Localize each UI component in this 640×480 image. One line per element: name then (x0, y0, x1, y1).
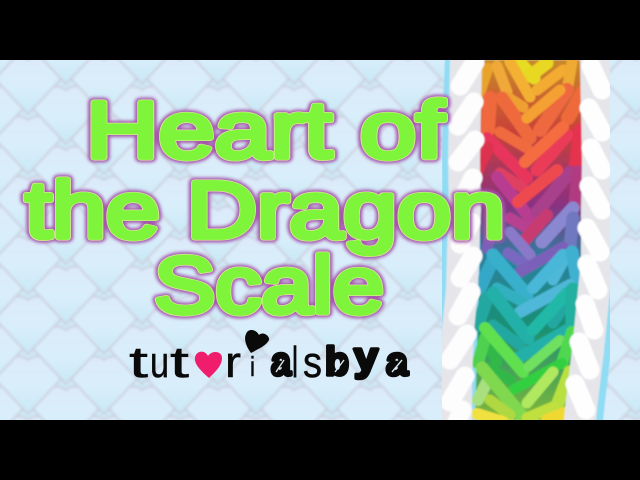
bracelet: rainbow dragon scale band (450, 60, 602, 424)
top black bar (0, 0, 640, 60)
bracelet dark core (475, 60, 585, 420)
amber and yellow row (480, 62, 572, 97)
logo thin letters (129, 338, 322, 387)
title cream edge: Scale (154, 240, 384, 330)
title cream edge: Heart of (86, 86, 445, 174)
logo bold letters (271, 335, 409, 384)
lime and yellow row (477, 368, 570, 422)
logo thin letters: t (170, 338, 189, 387)
title glow (25, 86, 505, 330)
title glow: the Dragon (25, 166, 505, 254)
green row (478, 328, 572, 390)
orange-red row (488, 90, 583, 138)
icon: black heart (245, 330, 269, 353)
logo thin letters: l (292, 338, 298, 387)
violet row (487, 208, 573, 272)
logo thin letters: i (250, 351, 255, 382)
logo: tutorialsbya (129, 330, 409, 387)
logo bold letters: a (271, 340, 292, 384)
bracelet light blue outline (458, 60, 598, 420)
coloured bands (477, 62, 583, 422)
logo bold letters: b (325, 340, 349, 384)
logo thin letters: u (150, 338, 169, 387)
white left strand (450, 60, 475, 424)
title cream edge: the Dragon (25, 166, 505, 254)
logo thin letters: r (225, 338, 241, 387)
title cream edge (25, 86, 505, 330)
blue row (480, 252, 578, 312)
title glow: Scale (154, 240, 384, 330)
magenta row (497, 170, 578, 240)
bottom black bar (0, 420, 640, 480)
icon: pink heart (195, 352, 222, 378)
logo letter highlights (276, 360, 402, 372)
title line 3: Scale (154, 240, 384, 330)
background: dragon scale pattern (0, 50, 640, 430)
title: Heart of the Dragon Scale (25, 86, 505, 330)
teal row (478, 290, 573, 358)
red-pink row (477, 127, 580, 178)
logo thin letters: t (129, 338, 148, 387)
title line 2: the Dragon (25, 166, 505, 254)
white right strand (575, 60, 602, 420)
logo thin letters: s (303, 338, 322, 387)
title glow: Heart of (86, 86, 445, 174)
logo bold letters: y (354, 335, 379, 379)
logo bold letters: a (386, 340, 409, 384)
title line 1: Heart of (86, 86, 445, 174)
